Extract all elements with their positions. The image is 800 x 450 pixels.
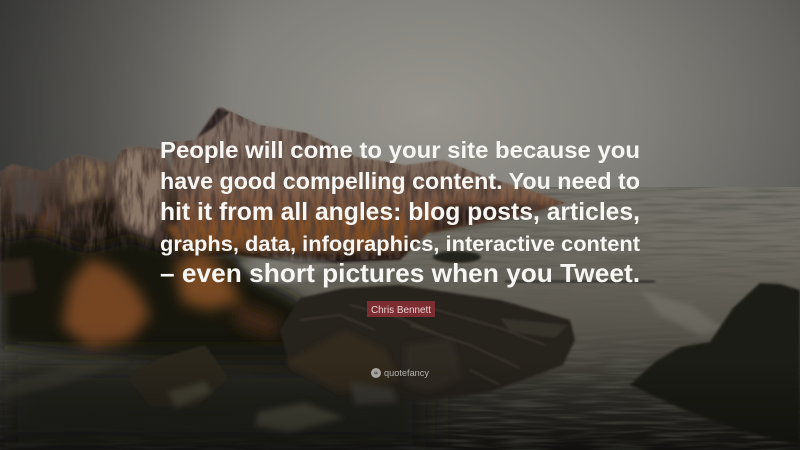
- rock: left group: [0, 146, 178, 262]
- overlay: bottom shade: [0, 360, 800, 450]
- author badge: [367, 301, 435, 317]
- quote text: – even short pictures when you Tweet.: [160, 258, 640, 288]
- quote text: have good compelling content. You need to: [160, 168, 640, 194]
- logo: quotefancy: quotefancy: [384, 368, 429, 379]
- icon: quote mark: “: [374, 370, 378, 380]
- rock: right foreground: [630, 283, 800, 445]
- quote text: People will come to your site because you: [160, 137, 640, 163]
- rocks: dark shoreline cluster: [128, 285, 575, 432]
- quote text: [160, 137, 640, 288]
- water: foam patch: [238, 256, 335, 284]
- texture: rock streaks: [0, 107, 564, 262]
- rock: brown foreground boulders: [62, 250, 280, 350]
- rocks: dark lower-left land: [0, 232, 320, 380]
- water: dark lower shallows: [0, 360, 430, 450]
- rocks: main headland: [0, 106, 566, 264]
- quote text: hit it from all angles: blog posts, articles,: [160, 198, 640, 226]
- quote text: graphs, data, infographics, interactive content: [160, 232, 640, 256]
- lit rock faces: [14, 150, 420, 252]
- lit ridges: [300, 305, 545, 385]
- logo: quotefancy: [371, 368, 429, 380]
- dark cleft and shadows: [197, 108, 230, 138]
- author badge: Chris Bennett: [371, 305, 431, 316]
- background: sea: [0, 187, 800, 450]
- background: sky: [0, 0, 800, 190]
